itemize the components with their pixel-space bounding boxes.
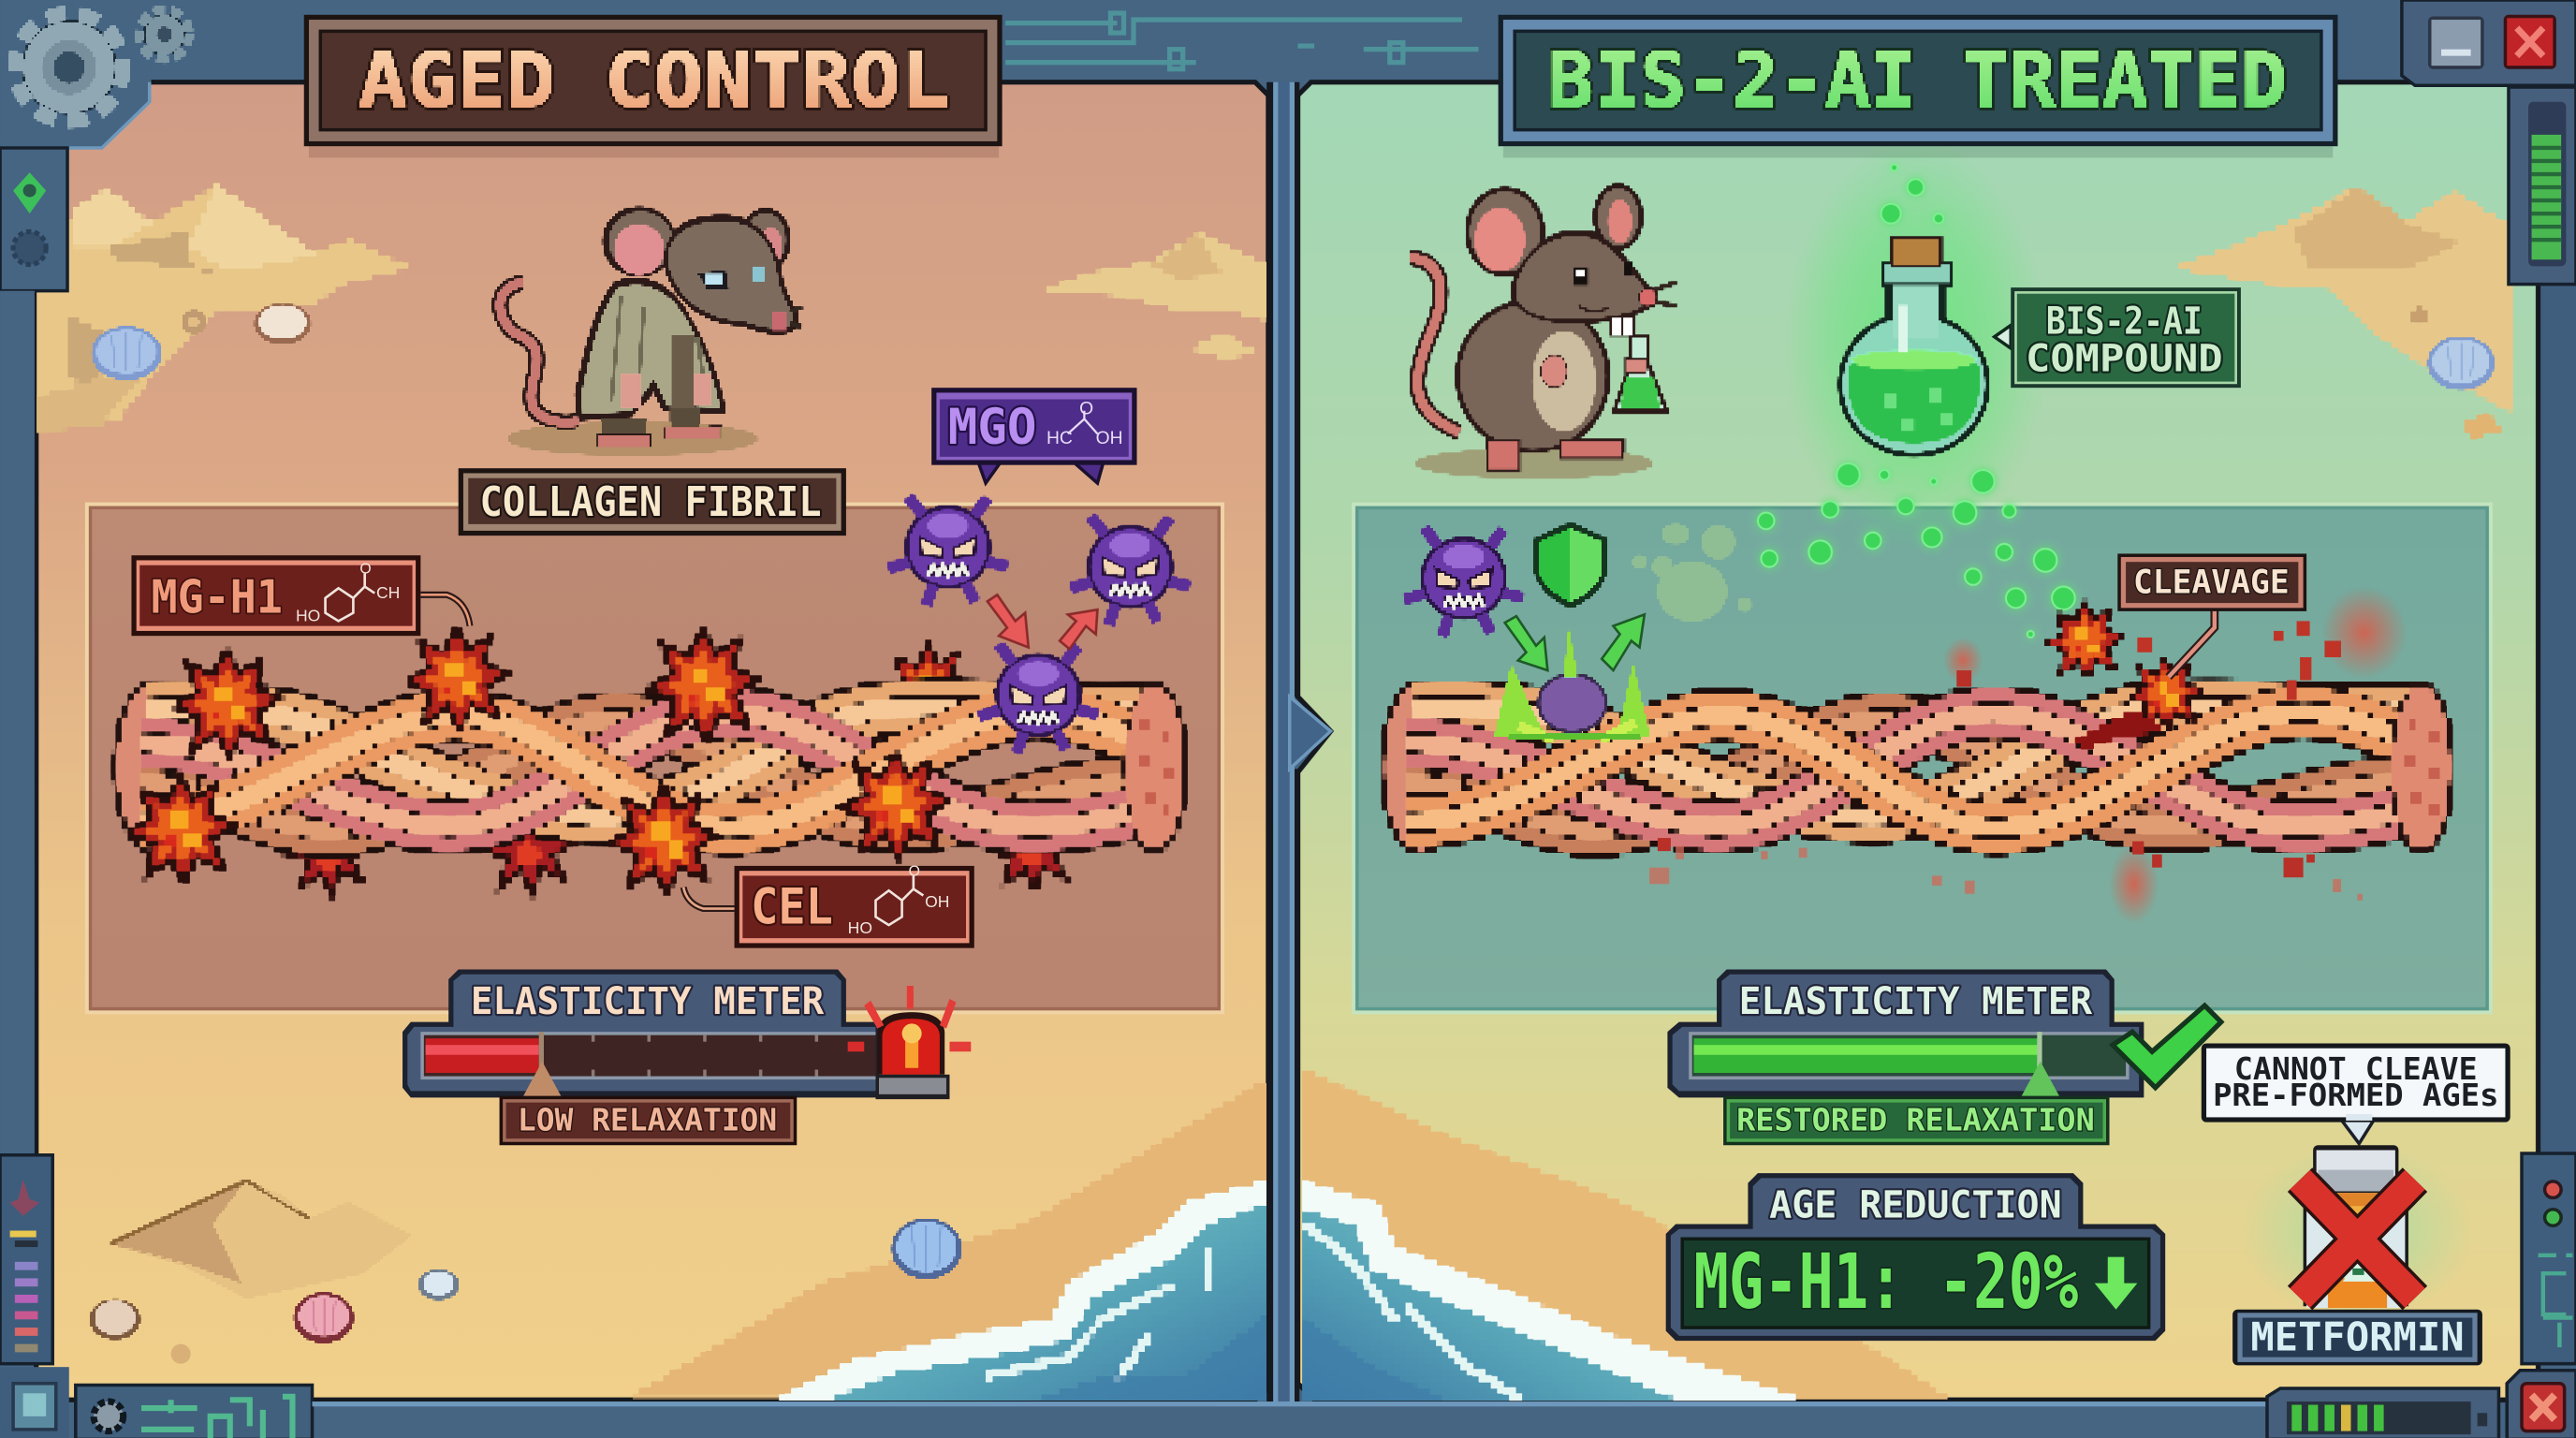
age reduction panel: AGE REDUCTION <box>1769 1182 2062 1226</box>
arrow green up <box>1602 614 1645 670</box>
metformin label: METFORMIN <box>2250 1314 2465 1360</box>
divider <box>1266 82 1331 1405</box>
elasticity meter right: ELASTICITY METER <box>1739 979 2093 1023</box>
age reduction panel <box>1666 1173 2165 1341</box>
label: MGO: OH <box>1096 429 1123 448</box>
label: MGO: HC <box>1046 429 1073 448</box>
banner: treated <box>1499 15 2337 146</box>
restored relaxation label <box>1723 1096 2110 1145</box>
left edge strip <box>0 291 35 1157</box>
speech bubble <box>2202 1043 2510 1143</box>
top-left corner chrome <box>0 0 187 148</box>
compound label <box>1995 287 2241 388</box>
debris particles <box>1649 587 2407 923</box>
arrow down red <box>988 594 1029 647</box>
banner shadow left <box>309 146 999 157</box>
shell cream <box>183 304 311 344</box>
compound label: COMPOUND <box>2026 337 2223 381</box>
germs MGO <box>894 501 1184 748</box>
bottom-left dune <box>111 1181 411 1298</box>
shell pink <box>294 1293 353 1343</box>
aged rat <box>500 207 802 455</box>
label: MG-H1: CH <box>376 583 400 602</box>
cleavage spikes <box>2048 604 2200 748</box>
collagen fibril left <box>113 681 1188 855</box>
label: CEL: HO <box>848 918 872 937</box>
bottom-left chrome <box>0 1367 313 1438</box>
flask <box>1838 238 1989 457</box>
arrow green down <box>1505 616 1547 670</box>
background spikes left <box>288 647 1072 892</box>
label: CEL: OH <box>925 892 949 911</box>
label: CEL: O <box>909 863 920 879</box>
treated rat <box>1410 184 1676 478</box>
banner shadow right <box>1503 146 2333 157</box>
shell white <box>419 1270 459 1299</box>
left dunes upper <box>39 185 411 431</box>
low relaxation label <box>500 1096 797 1145</box>
label: CEL <box>683 863 974 948</box>
label: cleavage: CLEAVAGE <box>2133 564 2290 602</box>
elasticity meter left <box>402 969 879 1097</box>
smoke cloud <box>1633 524 1751 621</box>
flask glow <box>1784 139 2047 550</box>
banner: aged control: AGED CONTROL <box>359 37 949 125</box>
shield <box>1534 522 1606 608</box>
arrow up red <box>1060 609 1097 649</box>
label: MG-H1: MG-H1 <box>152 570 283 624</box>
right lower panel <box>2522 1153 2576 1364</box>
circuit traces top center <box>1005 13 1479 69</box>
wet sand right <box>1301 1068 1945 1397</box>
wave left <box>781 1181 1265 1399</box>
fibril box left <box>87 505 1222 1012</box>
label: MGO <box>931 388 1137 483</box>
close button bottom <box>2507 1371 2576 1438</box>
window buttons <box>2402 0 2576 85</box>
banner: treated: BIS-2-AI TREATED <box>1547 37 2287 125</box>
alarm light <box>864 986 971 1099</box>
panel: aged control <box>37 82 1268 1400</box>
battery gauge <box>2267 1388 2498 1438</box>
wave right <box>1301 1181 1797 1399</box>
right level meter <box>2509 87 2576 285</box>
low relaxation label: LOW RELAXATION <box>518 1101 777 1137</box>
elasticity meter right <box>1667 969 2144 1097</box>
gear large <box>18 17 120 118</box>
collagen fibril right <box>1380 681 2454 855</box>
gear small <box>141 11 187 57</box>
label: MGO: MGO <box>948 399 1036 456</box>
shell blue <box>92 327 161 379</box>
left sidebar bottom <box>0 1155 52 1364</box>
banner: aged control <box>304 15 1003 146</box>
speech bubble: CANNOT CLEAVE <box>2234 1050 2478 1087</box>
label: collagen fibril <box>459 468 846 536</box>
fibril box right <box>1354 505 2491 1012</box>
speech bubble: PRE-FORMED AGEs <box>2213 1077 2498 1113</box>
age reduction panel: MG-H1: -20% <box>1693 1239 2078 1327</box>
right edge strip <box>2541 285 2576 1158</box>
label: collagen fibril: COLLAGEN FIBRIL <box>480 478 822 526</box>
shell right <box>2428 337 2494 389</box>
shell tan <box>91 1299 139 1339</box>
AGE spikes left <box>130 630 946 890</box>
check mark <box>2113 1005 2221 1088</box>
label: CEL: CEL <box>751 878 833 935</box>
close button <box>2504 15 2556 69</box>
compound bubbles <box>1758 165 2075 638</box>
restored relaxation label: RESTORED RELAXATION <box>1736 1101 2095 1137</box>
neutralized germ <box>1495 631 1649 740</box>
label: MGO: O <box>1079 399 1093 418</box>
bottom edge highlight <box>313 1401 2267 1406</box>
label: MG-H1: HO <box>296 606 320 624</box>
metformin bottle with cross <box>2243 1142 2472 1323</box>
wet sand left <box>633 1081 1265 1397</box>
compound label: BIS-2-AI <box>2046 299 2203 343</box>
label: MG-H1: O <box>359 562 372 578</box>
label: cleavage <box>2117 553 2306 677</box>
dunes right panel <box>2175 187 2510 437</box>
minimize button <box>2428 17 2484 69</box>
right dunes upper <box>1038 233 1266 359</box>
left sidebar top <box>0 148 67 291</box>
shell blue large <box>892 1219 961 1278</box>
germ right <box>1410 533 1518 631</box>
label: MG-H1 <box>131 555 470 636</box>
elasticity meter left: ELASTICITY METER <box>471 979 825 1023</box>
